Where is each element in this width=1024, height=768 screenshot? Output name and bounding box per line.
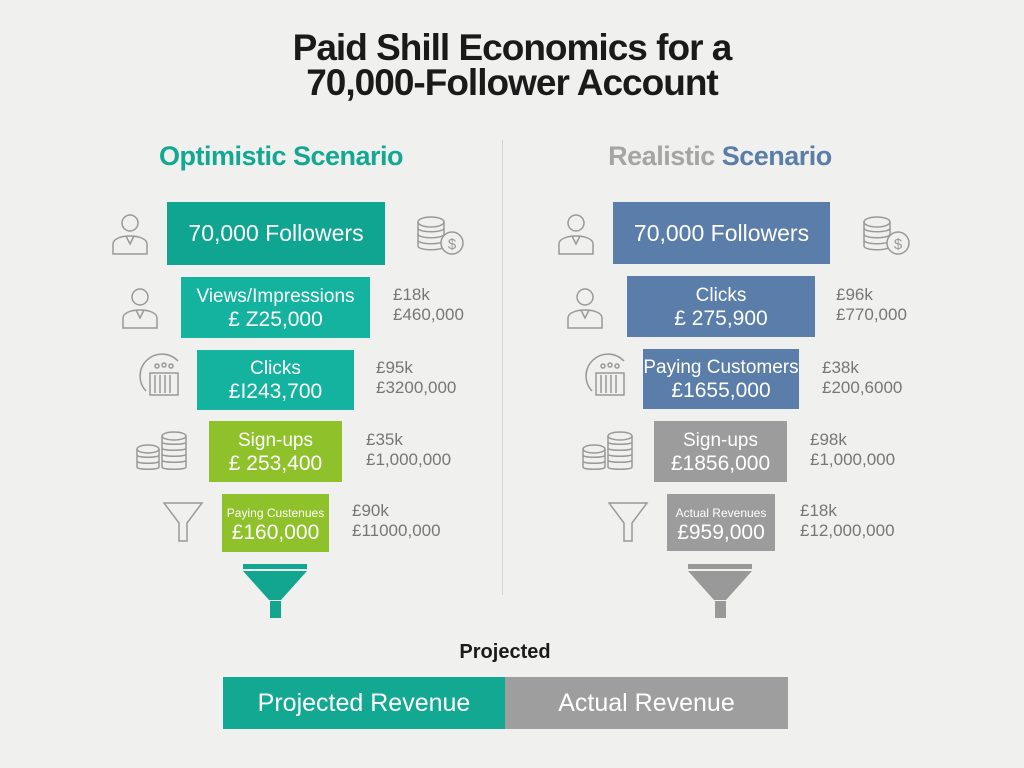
title: [293, 27, 733, 103]
icons: basket: [139, 353, 179, 396]
panel: realistic funnel: £770,000: [836, 305, 907, 324]
panel: realistic funnel: £12,000,000: [800, 521, 895, 540]
icons: person: [112, 214, 148, 255]
bar: actual revenue: [505, 677, 788, 729]
panel: optimistic funnel: £95k: [376, 358, 413, 377]
panel: realistic funnel: £1856,000: [671, 452, 770, 474]
panel: optimistic funnel: £3200,000: [376, 378, 456, 397]
label: projected: Projected: [459, 641, 551, 663]
labels: [393, 285, 464, 324]
revenue bar: [223, 677, 788, 729]
panel: realistic funnel: £1,000,000: [810, 450, 895, 469]
panel: realistic funnel: [613, 202, 907, 618]
heading: optimistic: Optimistic Scenario: [159, 141, 403, 171]
icons: coins with dollar: $: [448, 236, 457, 253]
icons: coins: [136, 431, 187, 470]
box: views: £ Z25,000: [228, 308, 323, 330]
title: 70,000-Follower Account: [306, 62, 718, 103]
panel: realistic funnel: £ 275,900: [674, 306, 768, 330]
bar: actual revenue: Actual Revenue: [558, 688, 735, 716]
text: $: [894, 236, 903, 253]
box: paying: £160,000: [232, 521, 319, 544]
funnel: [243, 564, 307, 618]
panel: realistic funnel: Sign-ups: [683, 430, 758, 450]
bar: projected revenue: [223, 677, 505, 729]
panel: realistic funnel: £200,6000: [822, 378, 902, 397]
box: clicks: £I243,700: [229, 380, 322, 403]
box: views: [181, 277, 370, 338]
box: followers: 70,000 Followers: [188, 220, 364, 246]
box: clicks: [197, 350, 354, 410]
labels: £460,000: [393, 305, 464, 324]
labels: £18k: [393, 285, 430, 304]
box: sign-ups: £ 253,400: [229, 452, 322, 474]
box: paying: [222, 494, 329, 552]
bar: projected revenue: Projected Revenue: [258, 688, 470, 716]
icons: coins with dollar: [417, 216, 464, 255]
panel: realistic funnel: £18k: [800, 501, 837, 520]
panel: realistic funnel: Clicks: [696, 284, 746, 306]
panel: realistic funnel: Actual Revenues: [676, 506, 766, 520]
panel: optimistic funnel: £90k: [352, 501, 389, 520]
icons: funnel outline: [163, 502, 204, 542]
panel: realistic funnel: £38k: [822, 358, 859, 377]
box: sign-ups: [209, 421, 342, 482]
box: views: Views/Impressions: [196, 286, 355, 306]
title: Paid Shill Economics for a: [293, 27, 731, 68]
box: paying: Paying Custenues: [227, 506, 324, 520]
panel: realistic funnel: Paying Customers: [643, 357, 799, 378]
panel: optimistic funnel: £11000,000: [352, 521, 441, 540]
panel: realistic funnel: £1655,000: [671, 379, 771, 402]
panel: realistic funnel: £959,000: [677, 520, 765, 544]
box: clicks: Clicks: [250, 358, 301, 379]
heading: realistic: Realistic Scenario: [608, 141, 832, 171]
panel: realistic funnel: £98k: [810, 430, 847, 449]
box: followers: [167, 202, 385, 265]
panel: realistic funnel: 70,000 Followers: [634, 220, 809, 246]
panel: optimistic funnel: £35k: [366, 430, 403, 449]
box: sign-ups: Sign-ups: [238, 430, 313, 450]
panel: optimistic funnel: £1,000,000: [366, 450, 451, 469]
panel: realistic funnel: £96k: [836, 285, 873, 304]
panel: optimistic funnel: [167, 202, 464, 618]
